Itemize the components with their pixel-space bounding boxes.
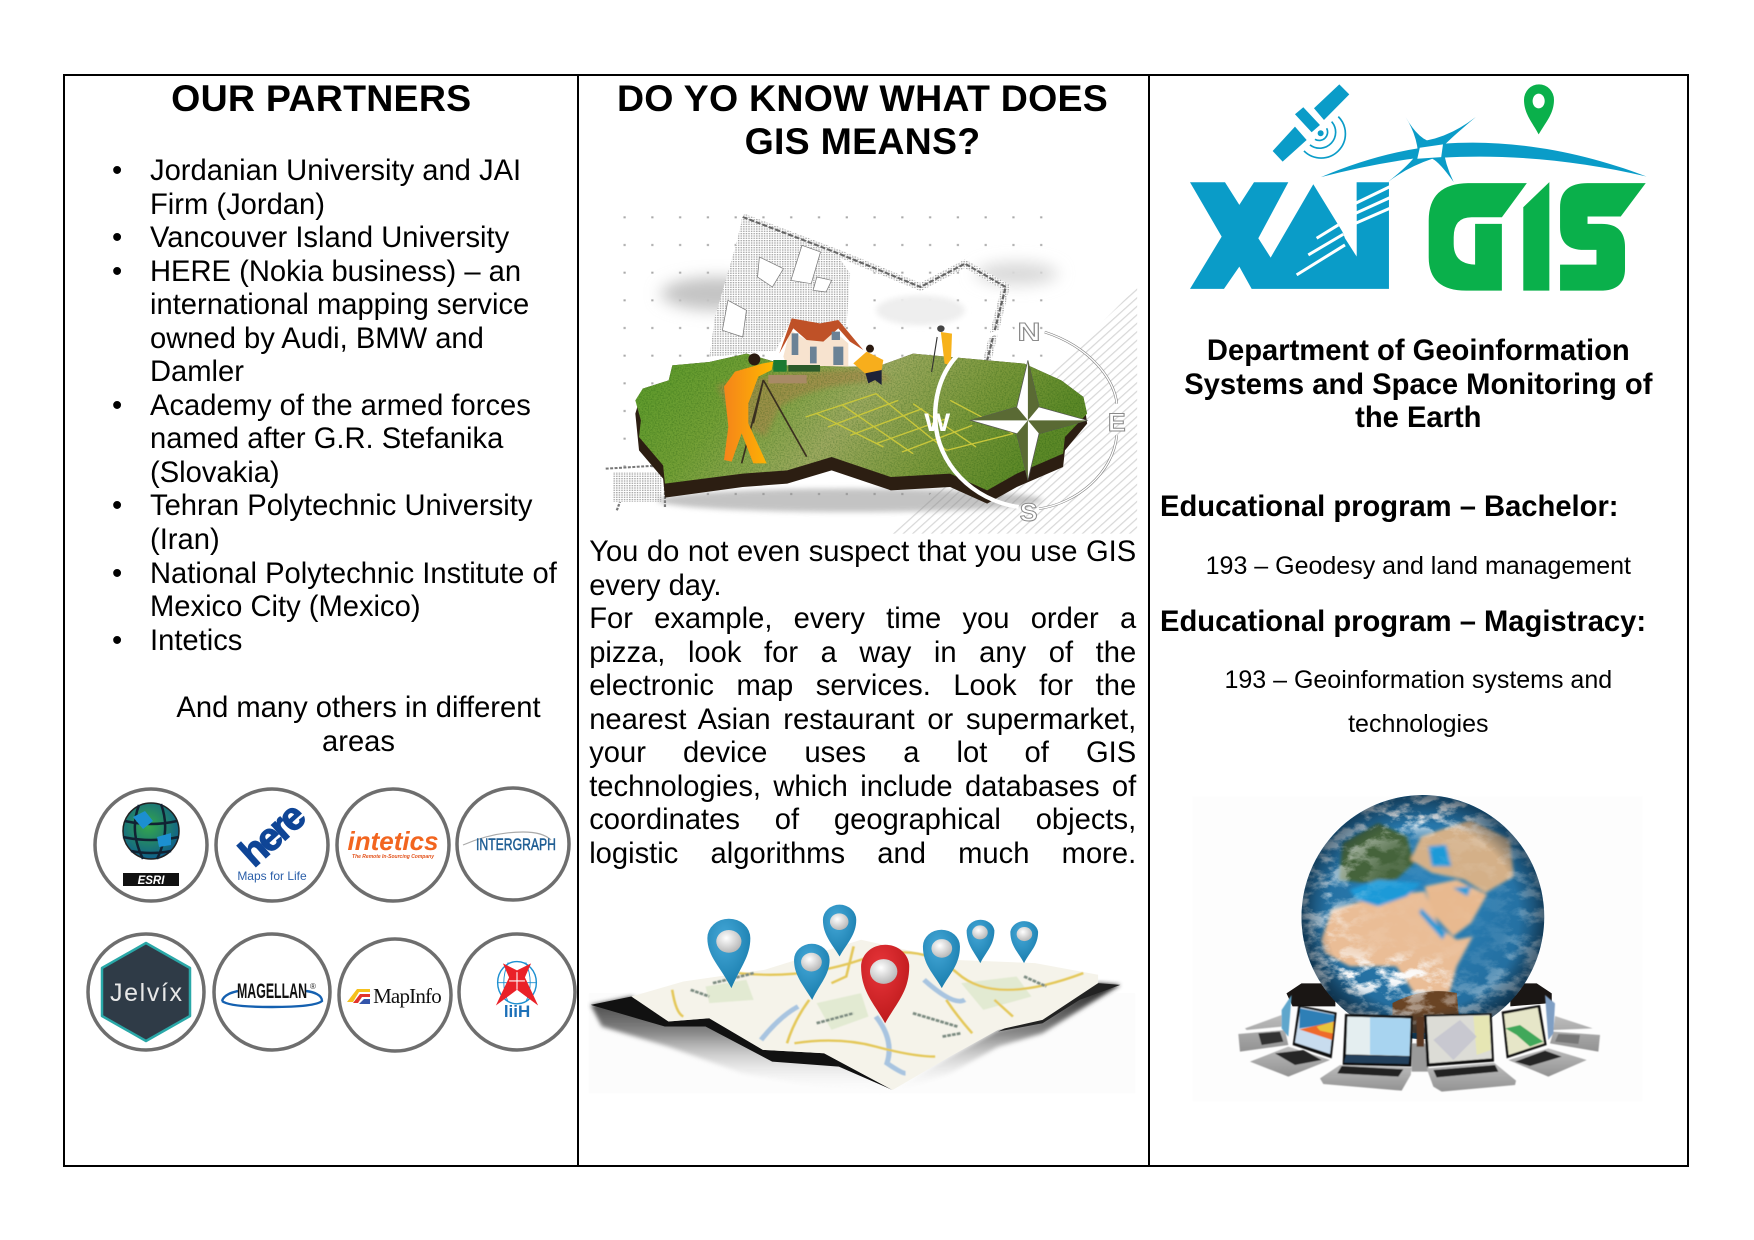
logo: intetics <box>335 787 451 903</box>
panel: department <box>1160 84 1652 1092</box>
partner list: Firm (Jordan) <box>150 189 325 221</box>
logo: esri: ESRI <box>138 875 165 887</box>
heading: GIS question: GIS MEANS? <box>745 120 980 162</box>
logo: intetics: intetics <box>347 826 439 856</box>
closing note: areas <box>322 726 395 758</box>
magistracy program: 193 – Geoinformation systems and <box>1224 666 1612 694</box>
land <box>658 489 1043 512</box>
logo: jelvix: Jelvíx <box>110 979 182 1007</box>
left laptop <box>1250 1047 1330 1077</box>
heading: our partners: OUR PARTNERS <box>171 77 471 119</box>
partner list: owned by Audi, BMW and <box>150 323 484 355</box>
partner list: Intetics <box>150 625 242 657</box>
ring <box>1286 983 1552 1006</box>
partner list <box>112 155 557 657</box>
closing note: And many others in different <box>176 692 541 724</box>
body text: GIS explanation: technologies, which include databases of <box>589 771 1136 803</box>
partner list: Academy of the armed forces <box>150 390 531 422</box>
body text: GIS explanation: coordinates of geographical objects, <box>589 804 1136 836</box>
green pin <box>1524 84 1554 134</box>
body text: GIS explanation: logistic algorithms and much more. <box>589 838 1136 870</box>
panel: our partners: • <box>112 558 122 590</box>
magistracy program: technologies <box>1348 710 1488 738</box>
logo: university emblem: liiH <box>504 1002 530 1021</box>
partner list: Vancouver Island University <box>150 222 509 254</box>
heading: GIS question: DO YO KNOW WHAT DOES <box>617 77 1108 119</box>
earth <box>1300 793 1550 1046</box>
rivers and roads <box>672 946 1083 1073</box>
compass: W <box>924 408 951 437</box>
logo: here: here <box>231 795 314 875</box>
surveyor: front <box>724 353 807 463</box>
illustration: folded map with pins <box>588 904 1122 1090</box>
logo: esri <box>93 787 209 903</box>
compass: S <box>1020 498 1038 527</box>
compass: N <box>1018 318 1040 346</box>
partner list: Mexico City (Mexico) <box>150 591 421 623</box>
partner list: international mapping service <box>150 289 529 321</box>
house <box>768 318 863 383</box>
panel: our partners: • <box>112 625 122 657</box>
logo: intetics: The Remote In-Sourcing Company <box>352 854 434 860</box>
body text: GIS explanation: For example, every time you order a <box>589 603 1136 635</box>
logo: XAI GIS <box>1190 84 1646 291</box>
partner list: (Slovakia) <box>150 457 280 489</box>
body text: GIS explanation: electronic map services. Look for the <box>589 670 1136 702</box>
map shadow <box>591 983 1120 1093</box>
panel: our partners <box>64 75 579 1167</box>
partner list: National Polytechnic Institute of <box>150 558 557 590</box>
grid lines <box>806 394 1013 454</box>
right laptop <box>1508 1048 1587 1077</box>
logo: here <box>214 787 330 903</box>
surveyor: crouching <box>853 345 883 385</box>
partner list: Damler <box>150 356 244 388</box>
magistracy program <box>1224 666 1612 738</box>
body text: GIS explanation: You do not even suspect that you use GIS <box>589 536 1136 568</box>
map sheet <box>631 940 1098 1090</box>
cadastral plan <box>709 217 850 357</box>
department name: Department of Geoinformation <box>1207 335 1630 367</box>
body text: GIS explanation: pizza, look for a way in any of the <box>589 637 1136 669</box>
body text: GIS explanation: your device uses a lot of GIS <box>589 737 1136 769</box>
surveyor: distant <box>932 325 952 372</box>
panel: our partners: • <box>112 222 122 254</box>
body text: GIS explanation: every day. <box>589 570 722 602</box>
illustration: surveyors on land with compass <box>606 214 1138 534</box>
bachelor program: 193 – Geodesy and land management <box>1206 552 1631 580</box>
laptops <box>1238 995 1600 1092</box>
swoosh and star <box>1321 143 1646 177</box>
far right laptops <box>1550 1016 1600 1052</box>
partner logos <box>86 786 577 1053</box>
logo: here: Maps for Life <box>237 869 307 883</box>
partner list: HERE (Nokia business) – an <box>150 256 521 288</box>
partner list: Jordanian University and JAI <box>150 155 521 187</box>
pins <box>707 905 1038 1023</box>
panel: our partners: • <box>112 256 122 288</box>
logo: magellan <box>212 932 332 1052</box>
partner list: named after G.R. Stefanika <box>150 423 503 455</box>
partner list: Tehran Polytechnic University <box>150 490 532 522</box>
panel: what does GIS mean <box>579 75 1150 1167</box>
partner list: (Iran) <box>150 524 220 556</box>
logo: magellan: ® <box>310 982 316 991</box>
compass <box>924 318 1126 527</box>
panel: our partners: • <box>112 390 122 422</box>
illustration: globe with laptops <box>1238 795 1600 1092</box>
bachelor heading: Educational program – Bachelor: <box>1160 491 1618 523</box>
panel: our partners: • <box>112 155 122 187</box>
GIS letters <box>1429 183 1527 291</box>
clouds <box>661 262 1058 310</box>
logo: university emblem <box>457 932 577 1052</box>
logo: jelvix <box>86 932 206 1052</box>
center-left laptop <box>1320 1065 1412 1091</box>
satellite and XAI letters <box>1190 84 1390 289</box>
center-right laptop <box>1427 1063 1516 1092</box>
magistracy heading: Educational program – Magistracy: <box>1160 606 1646 638</box>
department name: the Earth <box>1355 402 1482 434</box>
panel: our partners: • <box>112 490 122 522</box>
compass: E <box>1108 408 1126 437</box>
hatching <box>891 287 1137 534</box>
body text: GIS explanation: nearest Asian restaurant or supermarket, <box>589 704 1136 736</box>
heading: GIS question <box>617 77 1108 162</box>
department name <box>1184 335 1652 434</box>
logo: mapinfo: MapInfo <box>373 984 441 1008</box>
department name: Systems and Space Monitoring of <box>1184 369 1652 401</box>
far left laptops <box>1238 1015 1288 1052</box>
logo: intergraph <box>455 786 571 902</box>
body text: GIS explanation <box>589 536 1136 870</box>
closing note <box>176 692 541 758</box>
logo: mapinfo <box>337 937 453 1053</box>
